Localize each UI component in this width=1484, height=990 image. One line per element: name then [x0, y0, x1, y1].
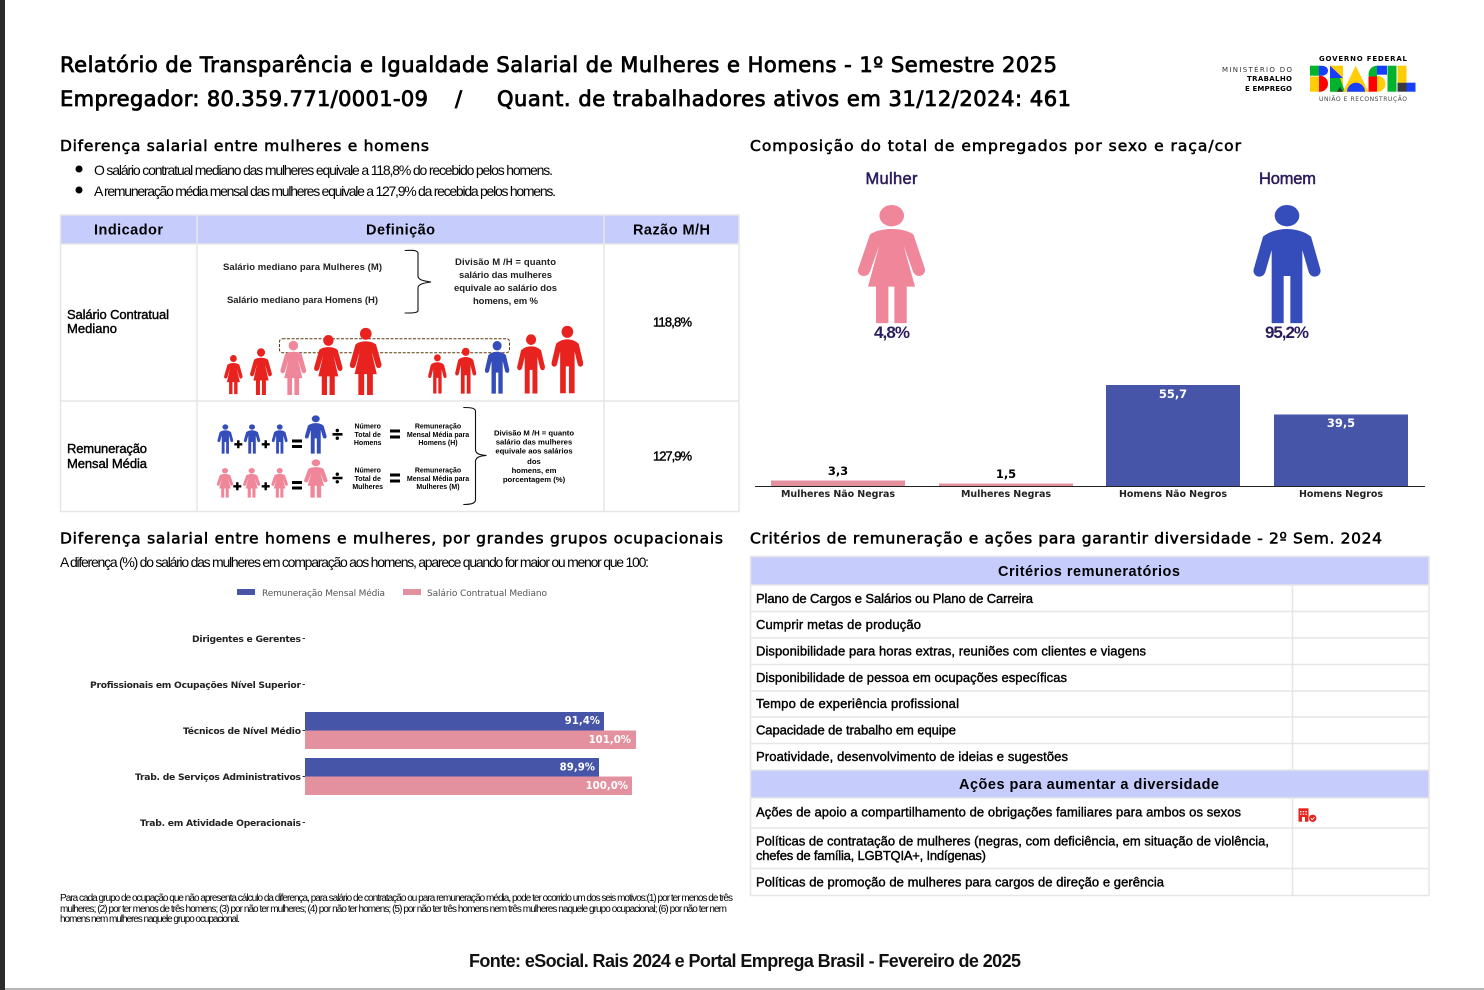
legend: [237, 588, 547, 599]
legend: Remuneração Mensal Média: [262, 588, 385, 599]
pictogram: homem: Homem: [1259, 170, 1316, 188]
definition: remuneração mensal média: Mensal Média para: [407, 432, 469, 439]
table: indicadores: [60, 215, 739, 512]
definition: remuneração mensal média: Mensal Média para: [407, 476, 469, 483]
subheading: A diferença (%) do salário das mulheres em comparação aos homens, aparece quando for maior ou menor que 100:: [60, 554, 649, 570]
definition: remuneração mensal média: equivale aos salários: [495, 446, 573, 456]
definition: salário contratual mediano: equivale ao salário dos: [454, 283, 557, 294]
definition: salário contratual mediano: [223, 250, 583, 395]
logo: ministério do trabalho e emprego: MINISTÉRIO DO: [1222, 65, 1292, 74]
definition: salário contratual mediano: Divisão M /H = quanto: [455, 257, 556, 268]
definition: salário contratual mediano: Salário mediano para Homens (H): [227, 295, 378, 306]
title: /: [455, 87, 463, 111]
table: critérios e ações: [750, 556, 1429, 896]
bar chart: composição: 39,5: [1327, 416, 1355, 430]
bullet points: [76, 162, 556, 199]
legend: Salário Contratual Mediano: [427, 589, 547, 599]
bar chart: grupos ocupacionais: [90, 634, 636, 829]
pictogram: homem: [1253, 170, 1321, 342]
pictogram: mulher: Mulher: [866, 170, 918, 188]
table: critérios e ações: Políticas de contratação de mulheres (negras, com deficiência, em situação de violência,: [756, 834, 1269, 848]
bar chart: composição: 55,7: [1159, 387, 1187, 401]
definition: remuneração mensal média: salário das mulheres: [496, 438, 572, 446]
heading: grupos ocupacionais: Diferença salarial entre homens e mulheres, por grandes grupos ocupacionais: [60, 530, 723, 548]
logo: governo federal brasil: UNIÃO E RECONSTRUÇÃO: [1319, 96, 1407, 103]
definition: remuneração mensal média: Mulheres: [352, 484, 383, 491]
heading: diferença salarial: Diferença salarial entre mulheres e homens: [60, 137, 429, 155]
table: indicadores: Definição: [366, 222, 435, 238]
title: Quant. de trabalhadores ativos em 31/12/2024: 461: [497, 87, 1071, 111]
table: indicadores: Mediano: [67, 321, 117, 336]
title: Empregador: 80.359.771/0001-09: [60, 87, 428, 111]
bar chart: composição: Mulheres Não Negras: [781, 489, 895, 500]
definition: remuneração mensal média: Divisão M /H = quanto: [494, 428, 574, 438]
table: critérios e ações: Ações para aumentar a diversidade: [959, 777, 1219, 793]
bar chart: grupos ocupacionais: Técnicos de Nível Médio: [183, 726, 301, 737]
left window edge: [0, 0, 5, 990]
logo: governo federal brasil: GOVERNO FEDERAL: [1319, 55, 1408, 63]
definition: remuneração mensal média: porcentagem (%): [503, 475, 566, 484]
bar chart: composição: 3,3: [828, 464, 848, 478]
bottom edge: [5, 988, 1484, 990]
bar chart: grupos ocupacionais: Profissionais em Ocupações Nível Superior: [90, 680, 301, 691]
table: indicadores: 118,8%: [653, 314, 692, 330]
definition: remuneração mensal média: Total de: [355, 432, 381, 439]
bar chart: grupos ocupacionais: Trab. de Serviços Administrativos: [135, 772, 302, 783]
definition: salário contratual mediano: Salário mediano para Mulheres (M): [223, 262, 382, 273]
bar chart: grupos ocupacionais: 91,4%: [565, 716, 600, 727]
definition: remuneração mensal média: Remuneração: [415, 468, 461, 474]
source: Fonte: eSocial. Rais 2024 e Portal Emprega Brasil - Fevereiro de 2025: [469, 951, 1021, 971]
bar chart: composição: Homens Negros: [1299, 489, 1383, 500]
bullet points: A remuneração média mensal das mulheres equivale a 127,9% da recebida pelos homens.: [94, 183, 556, 199]
bullet points: O salário contratual mediano das mulheres equivale a 118,8% do recebido pelos homens.: [94, 162, 553, 178]
table: critérios e ações: Plano de Cargos e Salários ou Plano de Carreira: [756, 591, 1034, 606]
table: critérios e ações: Disponibilidade de pessoa em ocupações específicas: [756, 670, 1068, 685]
table: critérios e ações: chefes de família, LGBTQIA+, Indígenas): [756, 848, 986, 863]
bar chart: grupos ocupacionais: 89,9%: [560, 762, 595, 774]
table: indicadores: Mensal Média: [67, 456, 148, 471]
bar chart: composição: [755, 385, 1425, 500]
table: indicadores: Remuneração: [67, 441, 147, 456]
pictogram: mulher: 4,8%: [874, 323, 910, 342]
heading: critérios: Critérios de remuneração e ações para garantir diversidade - 2º Sem. 2024: [750, 530, 1382, 548]
pictogram: mulher: [858, 170, 925, 342]
logo: ministério do trabalho e emprego: TRABALHO: [1247, 75, 1292, 83]
table: indicadores: Razão M/H: [633, 222, 710, 238]
definition: remuneração mensal média: Total de: [355, 476, 381, 483]
definition: remuneração mensal média: Mulheres (M): [416, 484, 460, 491]
icon: building with check: [1298, 808, 1317, 823]
bar chart: composição: Mulheres Negras: [961, 489, 1051, 500]
definition: remuneração mensal média: dos: [527, 457, 541, 466]
bar chart: grupos ocupacionais: Dirigentes e Gerentes: [192, 634, 302, 645]
logo: ministério do trabalho e emprego: [1222, 65, 1292, 93]
table: indicadores: 127,9%: [653, 448, 692, 464]
logo: ministério do trabalho e emprego: E EMPREGO: [1245, 85, 1292, 93]
footnote: mulheres; (2) por ter menos de três homens; (3) por não ter mulheres; (4) por não ter homens; (5) por não ter três homens nem três mulheres naquele grupo ocupacional; (6) por não ter nem: [60, 904, 727, 915]
bar chart: grupos ocupacionais: 100,0%: [586, 781, 628, 792]
heading: composição: Composição do total de empregados por sexo e raça/cor: [750, 137, 1242, 155]
title: Relatório de Transparência e Igualdade Salarial de Mulheres e Homens - 1º Semestre 2025: [60, 53, 1057, 77]
bar chart: grupos ocupacionais: 101,0%: [589, 735, 631, 746]
table: critérios e ações: Cumprir metas de produção: [756, 617, 921, 632]
title: [60, 53, 1071, 111]
definition: remuneração mensal média: [217, 408, 574, 504]
definition: salário contratual mediano: salário das mulheres: [459, 270, 552, 281]
pictogram: homem: 95,2%: [1265, 323, 1309, 342]
logo: governo federal brasil: [1310, 55, 1416, 103]
footnote: Para cada grupo de ocupação que não apresenta cálculo da diferença, para salário de contratação ou para remuneração média, pode ter ocorrido um dos seis motivos:(1) por ter menos de três: [60, 893, 733, 904]
bar chart: composição: Homens Não Negros: [1119, 489, 1227, 500]
definition: remuneração mensal média: Número: [354, 424, 381, 430]
table: critérios e ações: Capacidade de trabalho em equipe: [756, 722, 956, 738]
definition: salário contratual mediano: homens, em %: [473, 296, 539, 307]
footnote: [60, 893, 733, 925]
table: critérios e ações: Tempo de experiência profissional: [756, 696, 959, 711]
table: critérios e ações: Disponibilidade para horas extras, reuniões com clientes e viagens: [756, 644, 1146, 658]
table: critérios e ações: Ações de apoio a compartilhamento de obrigações familiares para ambos os sexos: [756, 804, 1242, 820]
bar chart: grupos ocupacionais: Trab. em Atividade Operacionais: [140, 818, 302, 829]
definition: remuneração mensal média: Homens (H): [418, 440, 458, 447]
table: critérios e ações: Proatividade, desenvolvimento de ideias e sugestões: [756, 749, 1068, 764]
definition: remuneração mensal média: homens, em: [512, 466, 557, 475]
table: indicadores: Indicador: [94, 222, 163, 238]
definition: remuneração mensal média: Remuneração: [415, 424, 461, 430]
table: critérios e ações: Critérios remuneratórios: [998, 564, 1180, 580]
definition: remuneração mensal média: Homens: [354, 440, 382, 447]
footnote: homens nem mulheres naquele grupo ocupacional.: [60, 914, 240, 925]
definition: remuneração mensal média: Número: [354, 468, 381, 474]
table: critérios e ações: Políticas de promoção de mulheres para cargos de direção e gerência: [756, 874, 1165, 890]
table: indicadores: Salário Contratual: [67, 307, 169, 322]
bar chart: composição: 1,5: [996, 467, 1016, 481]
